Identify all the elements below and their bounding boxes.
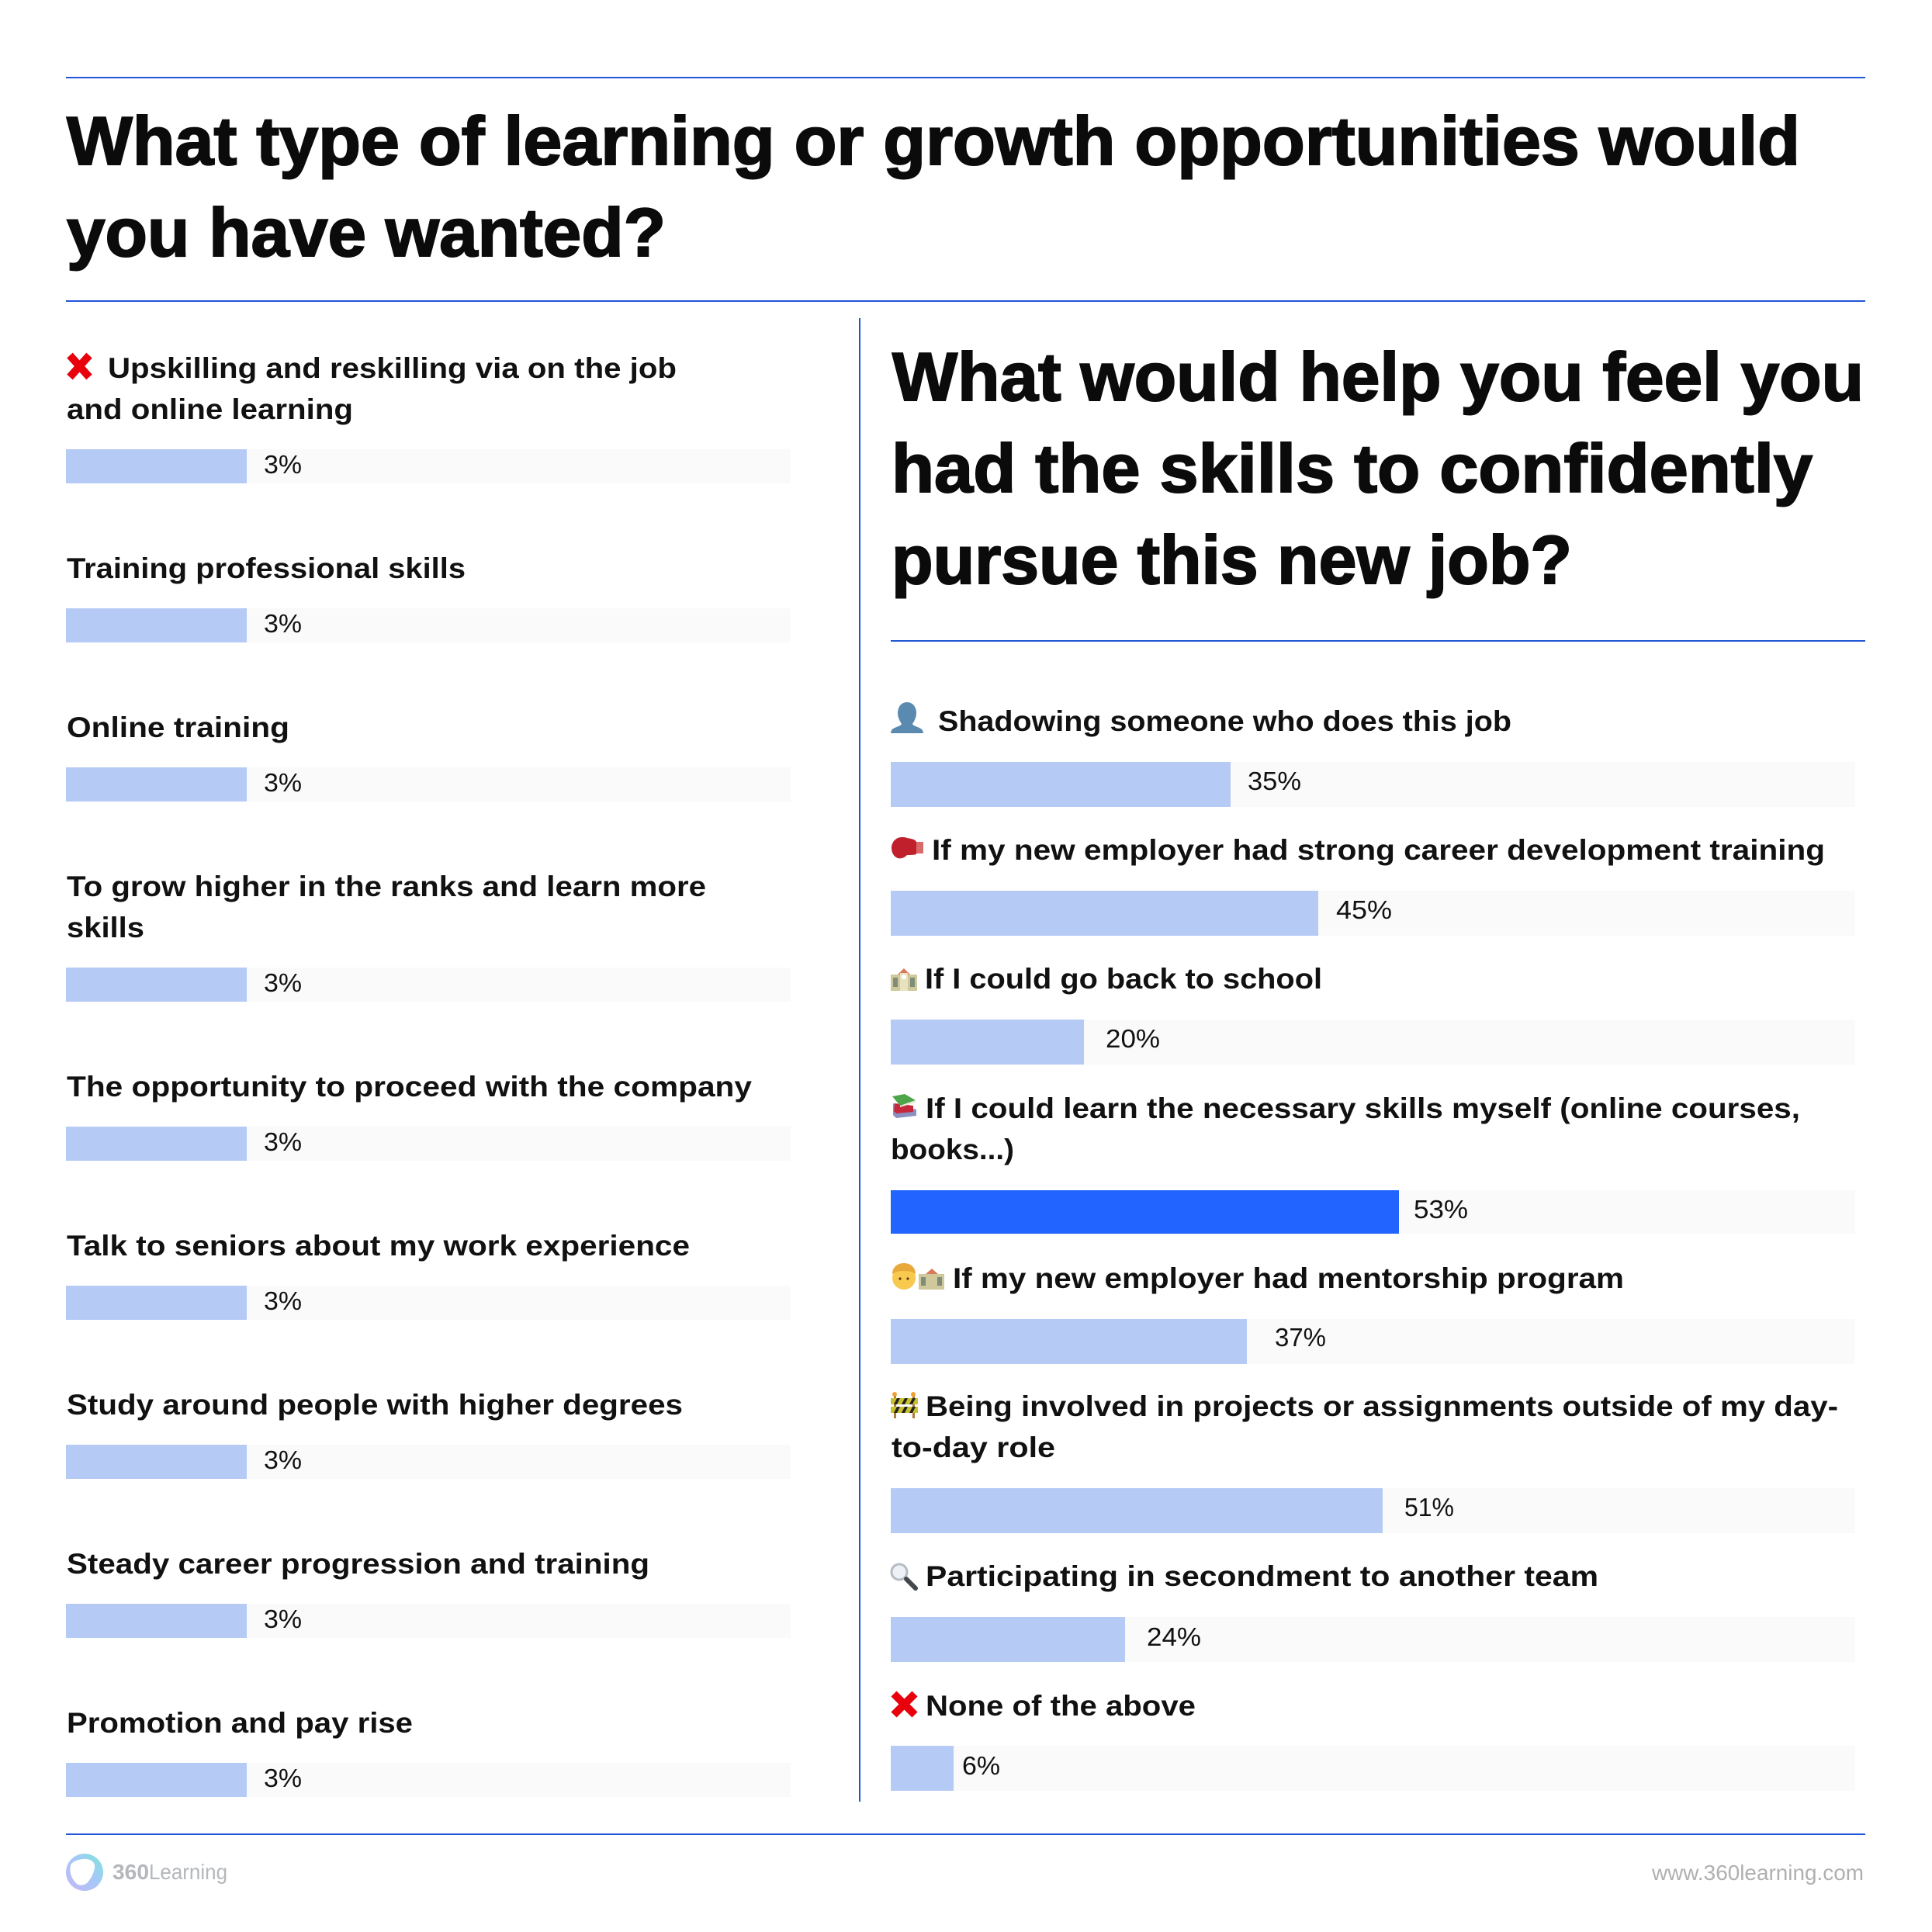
panel: learning opportunities chart: [66, 352, 791, 1797]
footer logo: 360Learning: 360: [113, 1860, 149, 1884]
item: training professional skills: Training professional skills: [67, 552, 466, 584]
item: shadowing: Shadowing someone who does this job: [938, 705, 1511, 737]
item: back to school: If I could go back to school: [925, 963, 1322, 995]
item: promotion and pay rise: Promotion and pay rise: [67, 1707, 413, 1739]
heading: skills to confidently pursue new job: What would help you feel you: [892, 338, 1864, 415]
item: projects outside of role: 51%: [1404, 1493, 1454, 1522]
item: upskilling and reskilling: 3%: [264, 450, 302, 479]
footer logo: 360Learning: Learning: [149, 1860, 227, 1884]
icon: magnifying glass: [892, 1564, 916, 1588]
item: learn skills myself: books...): [891, 1134, 1014, 1165]
panel: skills confidence chart: [891, 702, 1855, 1791]
item: opportunity to proceed: [66, 1071, 791, 1161]
item: talk to seniors: Talk to seniors about my work experience: [67, 1230, 690, 1262]
item: mentorship program: [891, 1262, 1855, 1364]
item: promotion and pay rise: [66, 1707, 791, 1797]
item: projects outside of role: Being involved in projects or assignments outside of my day-: [926, 1390, 1838, 1422]
item: shadowing: [891, 702, 1855, 807]
item: upskilling and reskilling: Upskilling and reskilling via on the job: [108, 352, 677, 384]
icon: person silhouette: [891, 702, 923, 733]
item: learn skills myself: [891, 1092, 1855, 1234]
item: study around people: 3%: [264, 1446, 302, 1474]
item: none of the above: 6%: [962, 1751, 1000, 1780]
item: learn skills myself: If I could learn the necessary skills myself (online courses,: [926, 1092, 1800, 1124]
item: grow higher in the ranks: [66, 871, 791, 1002]
item: steady career progression: 3%: [264, 1605, 302, 1633]
item: learn skills myself: 53%: [1414, 1195, 1468, 1224]
footer logo: 360Learning: [66, 1854, 227, 1891]
item: career development training: 45%: [1336, 895, 1392, 924]
footer url: www.360learning.com: [1651, 1861, 1864, 1885]
heading: skills to confidently pursue new job: pursue this new job?: [892, 521, 1572, 598]
item: none of the above: [891, 1690, 1855, 1791]
item: online training: 3%: [264, 768, 302, 797]
item: back to school: 20%: [1106, 1024, 1160, 1053]
item: career development training: [891, 834, 1855, 936]
heading: skills to confidently pursue new job: had the skills to confidently: [892, 430, 1813, 507]
item: study around people: Study around people with higher degrees: [67, 1389, 683, 1421]
item: shadowing: 35%: [1248, 767, 1301, 795]
item: study around people: [66, 1389, 791, 1479]
icon: red cross: [894, 1694, 915, 1715]
item: opportunity to proceed: 3%: [264, 1127, 302, 1156]
item: secondment: [891, 1560, 1855, 1662]
item: training professional skills: 3%: [264, 609, 302, 638]
item: online training: [66, 712, 791, 802]
icon: construction barrier: [891, 1392, 918, 1418]
item: grow higher in the ranks: To grow higher in the ranks and learn more: [67, 871, 706, 902]
item: steady career progression: Steady career progression and training: [67, 1548, 649, 1580]
item: back to school: [891, 963, 1855, 1065]
item: promotion and pay rise: 3%: [264, 1764, 302, 1792]
icon: man and school: [892, 1263, 944, 1290]
item: upskilling and reskilling: [66, 352, 791, 483]
item: upskilling and reskilling: and online learning: [67, 393, 353, 425]
item: career development training: If my new employer had strong career development training: [932, 834, 1825, 866]
icon: red cross: [70, 355, 89, 377]
icon: boxing glove: [892, 837, 923, 858]
item: none of the above: None of the above: [926, 1690, 1196, 1722]
item: opportunity to proceed: The opportunity to proceed with the company: [67, 1071, 752, 1103]
item: grow higher in the ranks: skills: [67, 912, 144, 943]
icon: stack of books: [892, 1094, 916, 1118]
item: projects outside of role: [891, 1390, 1855, 1533]
heading: skills to confidently pursue new job: [892, 338, 1864, 598]
item: online training: Online training: [67, 712, 289, 743]
item: projects outside of role: to-day role: [892, 1432, 1055, 1463]
item: mentorship program: If my new employer had mentorship program: [953, 1262, 1624, 1294]
item: training professional skills: [66, 552, 791, 642]
icon: ring logo: [66, 1854, 103, 1891]
icon: school building: [891, 968, 917, 991]
item: secondment: 24%: [1147, 1622, 1201, 1651]
title: learning or growth opportunities: you have wanted?: [67, 194, 666, 271]
item: grow higher in the ranks: 3%: [264, 968, 302, 997]
item: steady career progression: [66, 1548, 791, 1638]
item: mentorship program: 37%: [1275, 1323, 1326, 1352]
item: talk to seniors: [66, 1230, 791, 1320]
title: learning or growth opportunities: What type of learning or growth opportunities would: [67, 102, 1800, 179]
title: learning or growth opportunities: [67, 102, 1800, 271]
item: secondment: Participating in secondment to another team: [926, 1560, 1598, 1592]
item: talk to seniors: 3%: [264, 1286, 302, 1315]
